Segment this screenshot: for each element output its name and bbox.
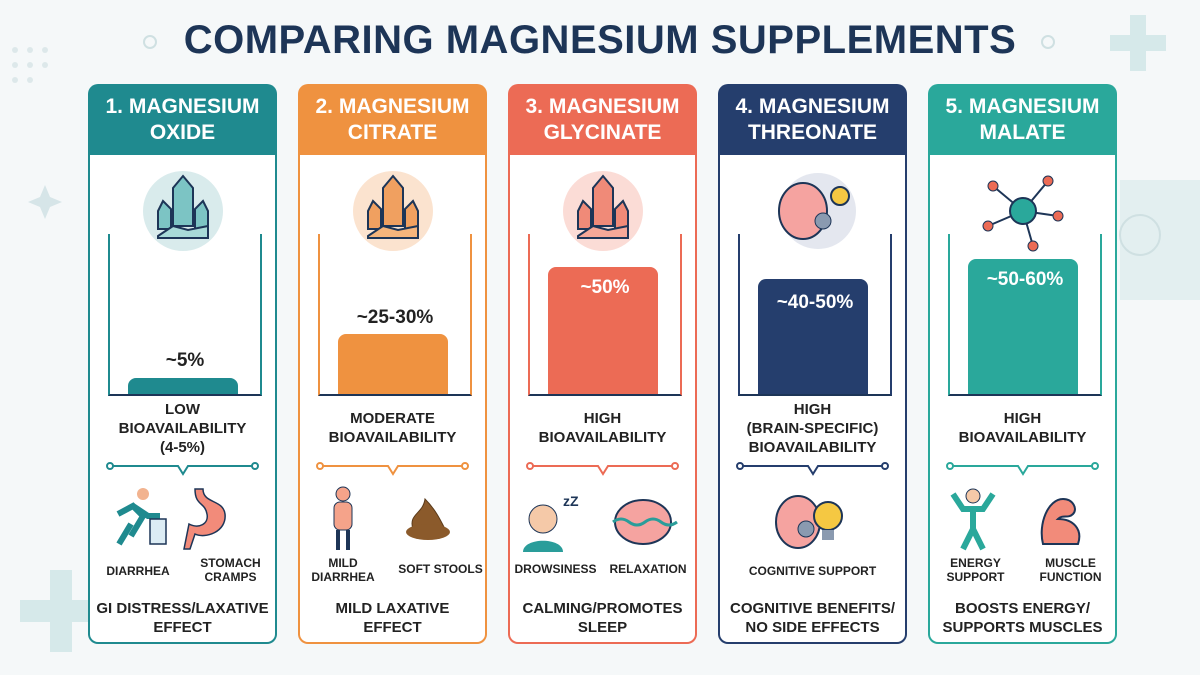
effect summary (336, 600, 449, 636)
heading (928, 84, 1117, 155)
panel: magnesium malate: FUNCTION (1040, 570, 1102, 584)
effect summary (96, 600, 269, 636)
bioavailability label: (4-5%) (160, 439, 205, 456)
panel: magnesium citrate (298, 84, 487, 644)
bar chart (738, 234, 892, 396)
bioavailability label: HIGH (1004, 410, 1041, 427)
effect summary (730, 600, 895, 636)
panel: magnesium oxide: STOMACH (200, 556, 261, 570)
bar chart: ~50% (580, 277, 630, 298)
bioavailability label (539, 410, 666, 446)
bioavailability label (747, 401, 878, 456)
effect summary: SUPPORTS MUSCLES (942, 619, 1103, 636)
heading: 5. MAGNESIUM (945, 95, 1100, 118)
effect summary: BOOSTS ENERGY/ (955, 600, 1090, 617)
effect summary (942, 600, 1103, 636)
bioavailability label: BIOAVAILABILITY (119, 420, 246, 437)
panel: magnesium glycinate: DROWSINESS (514, 562, 596, 576)
effect summary (522, 600, 682, 636)
bioavailability label: HIGH (584, 410, 621, 427)
bar chart (318, 234, 472, 396)
bioavailability label: BIOAVAILABILITY (749, 439, 876, 456)
panel: magnesium glycinate (508, 84, 697, 644)
bar chart: ~50-60% (987, 269, 1063, 290)
bioavailability label: (BRAIN-SPECIFIC) (747, 420, 878, 437)
bioavailability label: HIGH (794, 401, 831, 418)
heading (718, 84, 907, 155)
panel: magnesium threonate (718, 84, 907, 644)
heading: GLYCINATE (544, 121, 661, 144)
panel: magnesium malate: SUPPORT (946, 570, 1004, 584)
heading (88, 84, 277, 155)
panel: magnesium citrate: MILD (328, 556, 358, 570)
bioavailability label: BIOAVAILABILITY (329, 429, 456, 446)
icon: cognitive support (775, 495, 843, 549)
bar chart (528, 234, 682, 396)
icons: side effects (116, 488, 226, 550)
icon: crystal (353, 171, 433, 251)
heading: 2. MAGNESIUM (315, 95, 470, 118)
bioavailability label (959, 410, 1086, 446)
bar chart: ~25-30% (357, 307, 433, 328)
heading: OXIDE (150, 121, 215, 144)
effect summary: NO SIDE EFFECTS (745, 619, 880, 636)
title: COMPARING MAGNESIUM SUPPLEMENTS (184, 18, 1016, 62)
heading: 3. MAGNESIUM (525, 95, 680, 118)
heading: MALATE (980, 121, 1065, 144)
bar chart (948, 234, 1102, 396)
bioavailability label (119, 401, 246, 456)
effect summary: SLEEP (578, 619, 627, 636)
effect summary: GI DISTRESS/LAXATIVE (96, 600, 269, 617)
panel: magnesium threonate: COGNITIVE SUPPORT (749, 564, 876, 578)
panel: magnesium malate (928, 84, 1117, 644)
panel: magnesium citrate: DIARRHEA (311, 570, 375, 584)
icon: crystal (563, 171, 643, 251)
icons: effects (950, 488, 1080, 550)
heading: CITRATE (348, 121, 437, 144)
effect summary: COGNITIVE BENEFITS/ (730, 600, 895, 617)
icons: effects: zZ (563, 493, 579, 509)
effect summary: EFFECT (363, 619, 422, 636)
bar chart: ~5% (166, 350, 204, 371)
effect summary: MILD LAXATIVE (336, 600, 449, 617)
bioavailability label: BIOAVAILABILITY (959, 429, 1086, 446)
icons: effects (523, 493, 678, 552)
icon: crystal (143, 171, 223, 251)
bar chart (108, 234, 262, 396)
bioavailability label (329, 410, 456, 446)
icons: side effects (334, 486, 450, 550)
panel: magnesium citrate: SOFT STOOLS (398, 562, 483, 576)
panel: magnesium oxide: DIARRHEA (106, 564, 170, 578)
panel: magnesium malate: ENERGY (950, 556, 1001, 570)
effect summary: CALMING/PROMOTES (522, 600, 682, 617)
heading: 4. MAGNESIUM (735, 95, 890, 118)
bar chart: ~40-50% (777, 292, 853, 313)
panel: magnesium malate: MUSCLE (1045, 556, 1096, 570)
bioavailability label: BIOAVAILABILITY (539, 429, 666, 446)
icon: brain and bulb (778, 173, 856, 249)
heading (298, 84, 487, 155)
panel: magnesium oxide: CRAMPS (204, 570, 256, 584)
bioavailability label: MODERATE (350, 410, 435, 427)
effect summary: EFFECT (153, 619, 212, 636)
heading: 1. MAGNESIUM (105, 95, 260, 118)
panel: magnesium oxide (88, 84, 277, 644)
heading: THREONATE (748, 121, 877, 144)
panel: magnesium glycinate: RELAXATION (609, 562, 687, 576)
heading (508, 84, 697, 155)
bioavailability label: LOW (165, 401, 200, 418)
icon: molecule (982, 176, 1064, 252)
